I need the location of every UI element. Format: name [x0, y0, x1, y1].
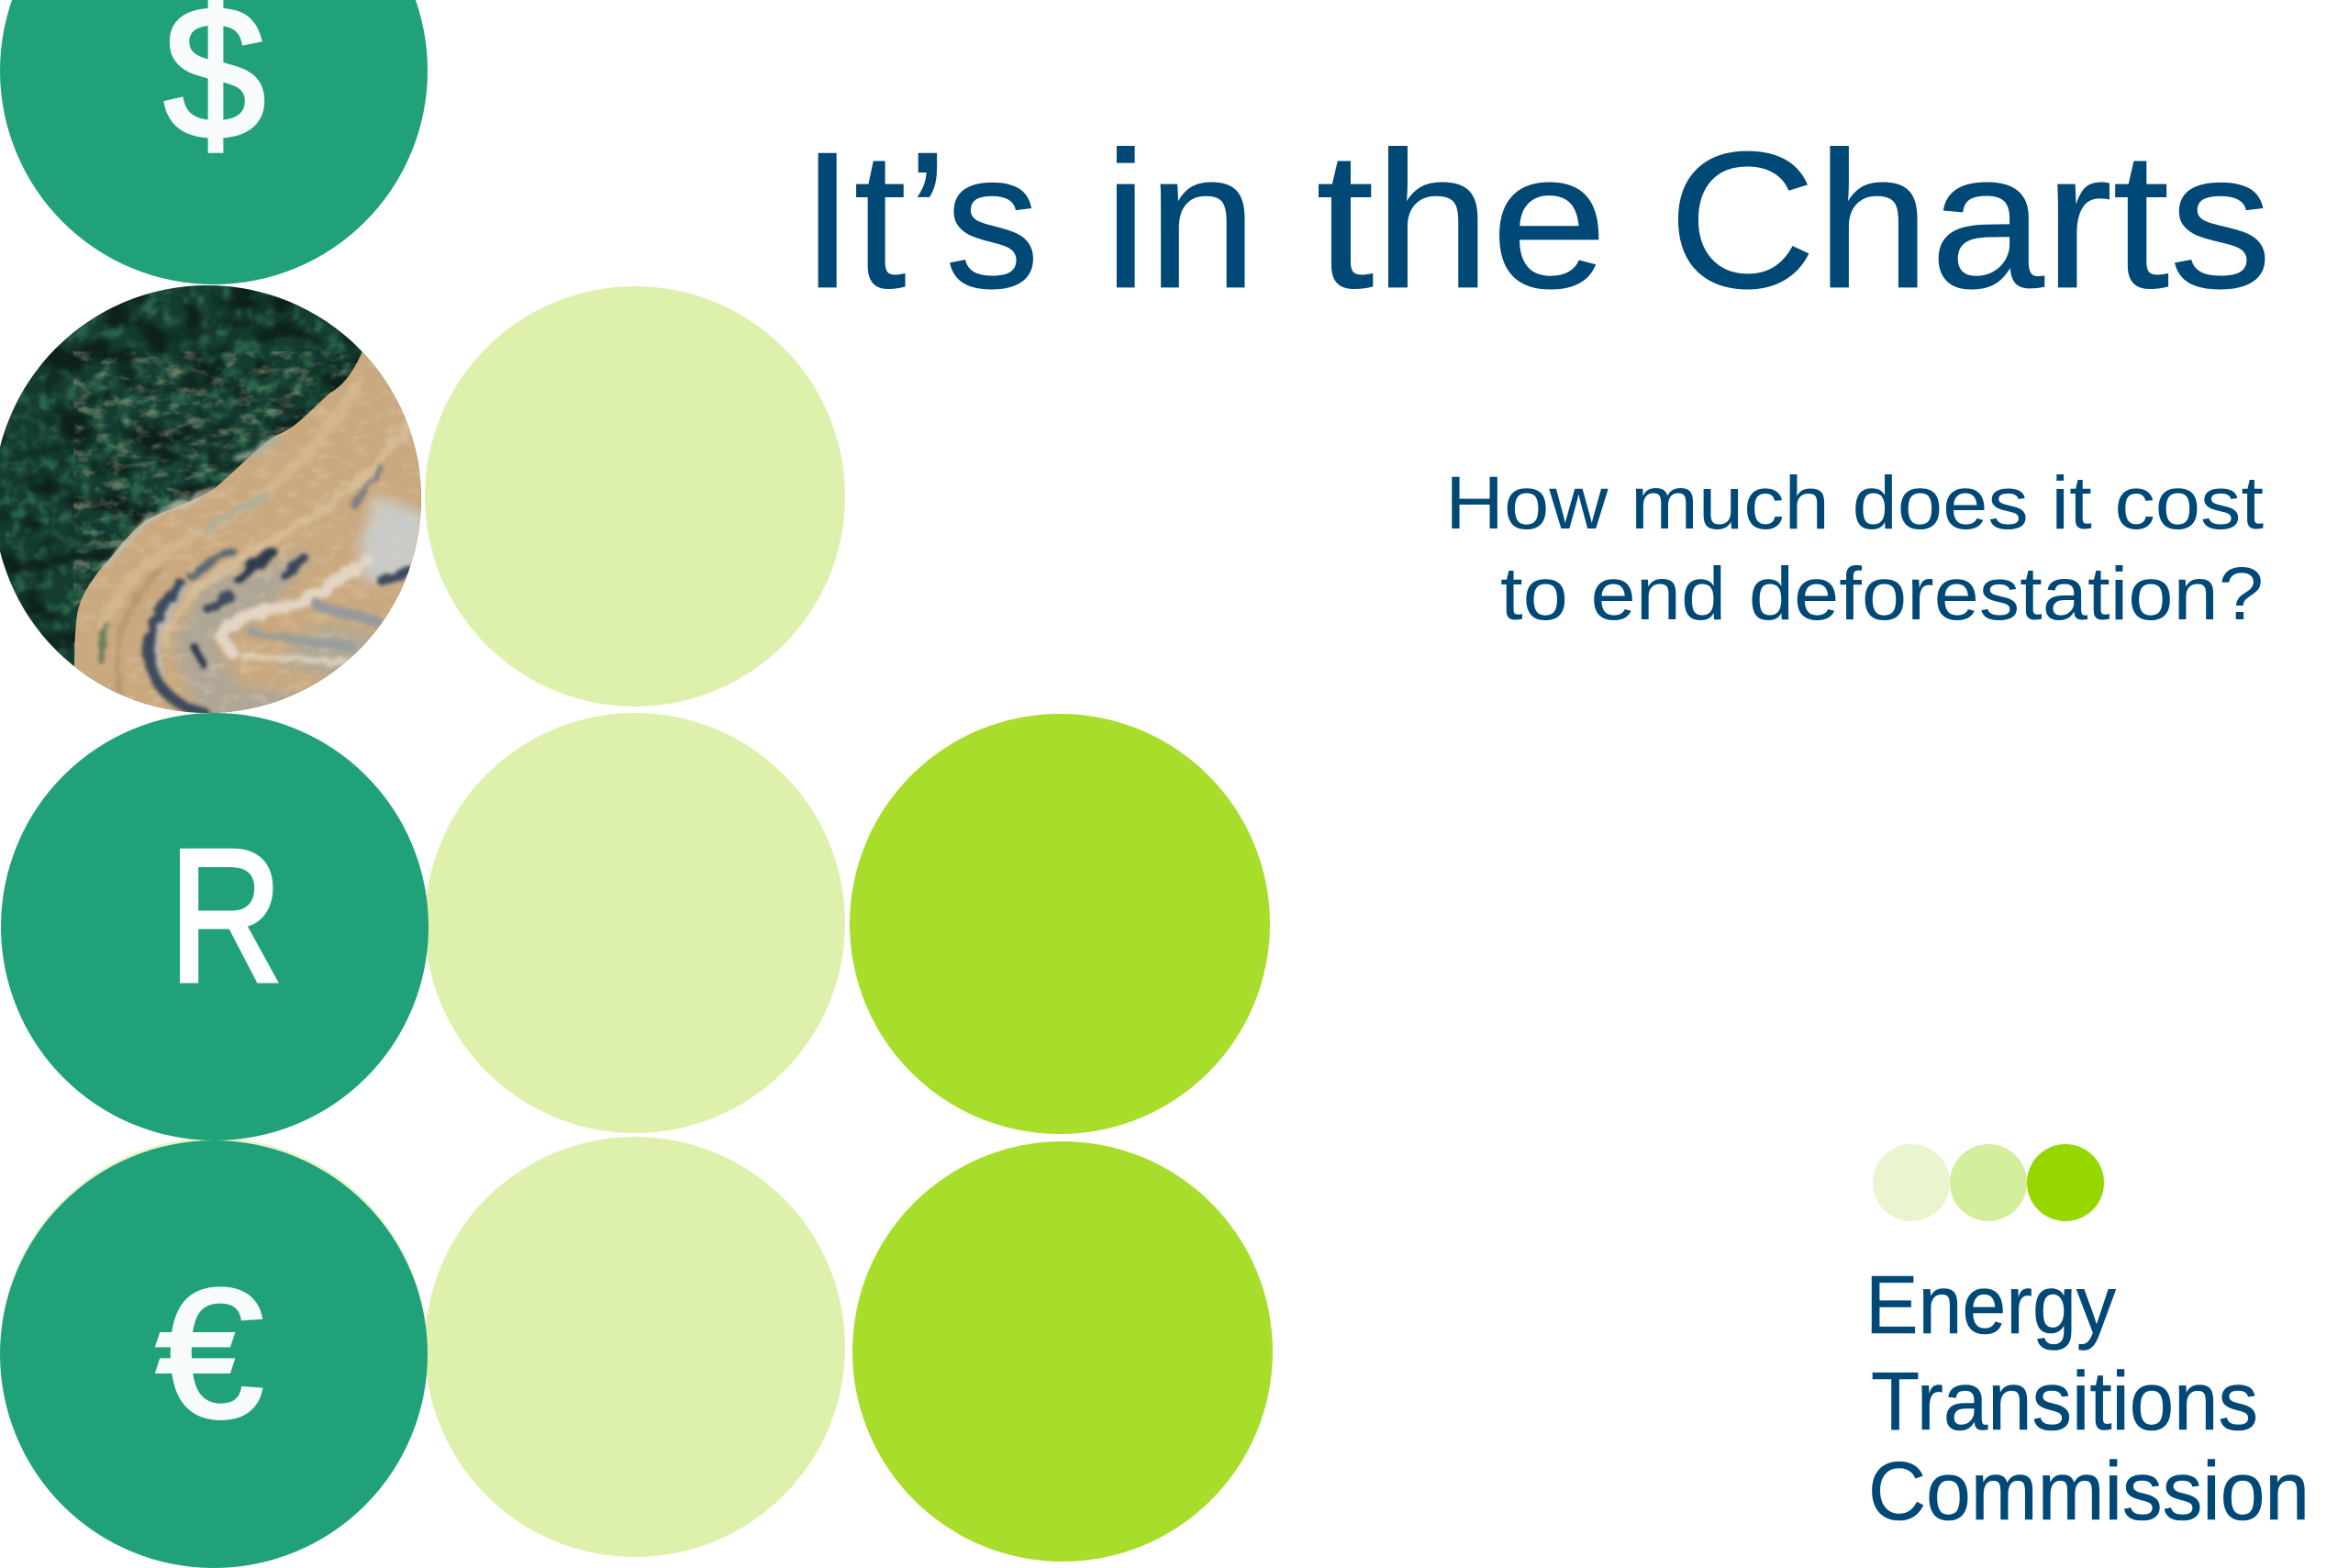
circle: lime row 4	[852, 1141, 1273, 1562]
logo wordmark: Transitions	[1871, 1356, 2258, 1448]
icon: letter R: R	[169, 810, 283, 1021]
logo wordmark: Energy	[1865, 1260, 2116, 1351]
icon: euro sign: €	[156, 1251, 263, 1456]
logo wordmark	[1865, 1260, 2310, 1538]
circle: dollar	[0, 0, 428, 284]
circle: pale green row 2	[425, 286, 845, 706]
logo dots	[1873, 1144, 2104, 1221]
circle: rand	[1, 713, 429, 1140]
logo: Energy Transitions Commission	[1865, 1144, 2310, 1538]
title: Charts	[1668, 111, 2272, 328]
title: the	[1316, 111, 1608, 328]
circle: euro	[0, 1140, 428, 1568]
circle: lime row 3	[850, 714, 1270, 1134]
circle: pale green row 3	[425, 713, 845, 1133]
subtitle: to end deforestation?	[1500, 552, 2264, 636]
logo wordmark: Commission	[1868, 1446, 2310, 1538]
circle: pale green row 4	[425, 1137, 845, 1557]
subtitle: How much does it cost	[1445, 462, 2264, 545]
subtitle	[1445, 462, 2264, 636]
photo: deforested land aerial view	[0, 285, 421, 713]
title	[801, 111, 2272, 328]
circle: pale green behind euro	[0, 1138, 428, 1565]
title: in	[1104, 111, 1257, 328]
title: It’s	[801, 111, 1040, 328]
